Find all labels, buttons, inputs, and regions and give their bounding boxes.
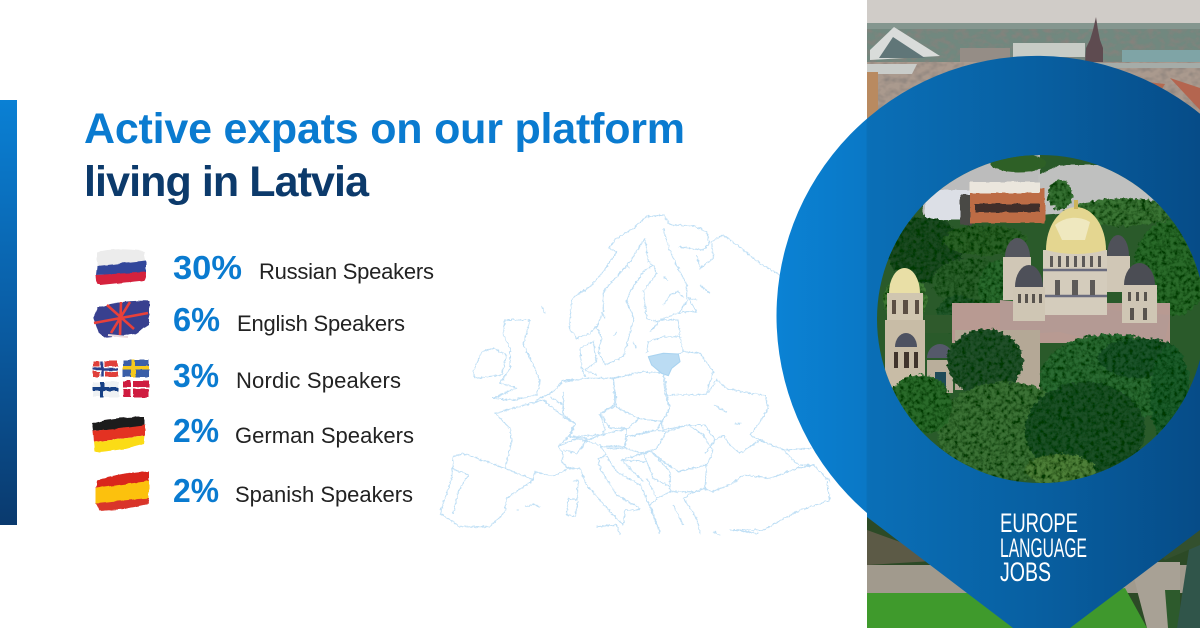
logo: Europe Language Jobs: EUROPE <box>1000 508 1078 538</box>
left accent bar <box>0 100 17 525</box>
icon: German flag <box>92 417 145 452</box>
buildings behind cathedral <box>923 154 1160 225</box>
title <box>84 105 685 206</box>
row: Nordic speakers: Nordic Speakers <box>236 368 401 393</box>
row: Spanish speakers: 2% <box>173 472 219 509</box>
foreground trees <box>888 329 1190 486</box>
title: Active expats on our platform <box>84 105 685 153</box>
row: German speakers: German Speakers <box>235 423 414 448</box>
highlighted country <box>648 353 680 376</box>
landmark tower <box>1085 17 1103 62</box>
row: Russian speakers: Russian Speakers <box>259 259 434 284</box>
row: English speakers: English Speakers <box>237 311 405 336</box>
row: Nordic speakers <box>93 357 401 398</box>
location pin <box>776 56 1200 628</box>
row: German speakers <box>92 412 414 452</box>
photo: Riga city background <box>867 0 1200 628</box>
title: living in Latvia <box>84 158 370 206</box>
map of Europe <box>440 215 830 535</box>
cathedral body <box>885 200 1170 393</box>
icon: Russian flag <box>96 249 146 285</box>
icon: Nordic flags <box>93 360 149 398</box>
row: Russian speakers <box>96 249 434 286</box>
row: German speakers: 2% <box>173 412 219 449</box>
row: Russian speakers: 30% <box>173 249 242 286</box>
logo: Europe Language Jobs: JOBS <box>1000 557 1051 587</box>
icon: British flag <box>93 301 149 338</box>
ground below the pin <box>867 517 1189 628</box>
background trees <box>883 180 1200 335</box>
row: English speakers <box>93 301 405 338</box>
logo: Europe Language Jobs: LANGUAGE <box>1000 533 1087 563</box>
row: Spanish speakers: Spanish Speakers <box>235 482 413 507</box>
row: English speakers: 6% <box>173 301 220 338</box>
row: Nordic speakers: 3% <box>173 357 219 394</box>
logo: Europe Language Jobs <box>1000 508 1087 587</box>
photo: cathedral in circle <box>877 154 1200 486</box>
icon: Spanish flag <box>96 471 149 511</box>
row: Spanish speakers <box>96 471 413 511</box>
